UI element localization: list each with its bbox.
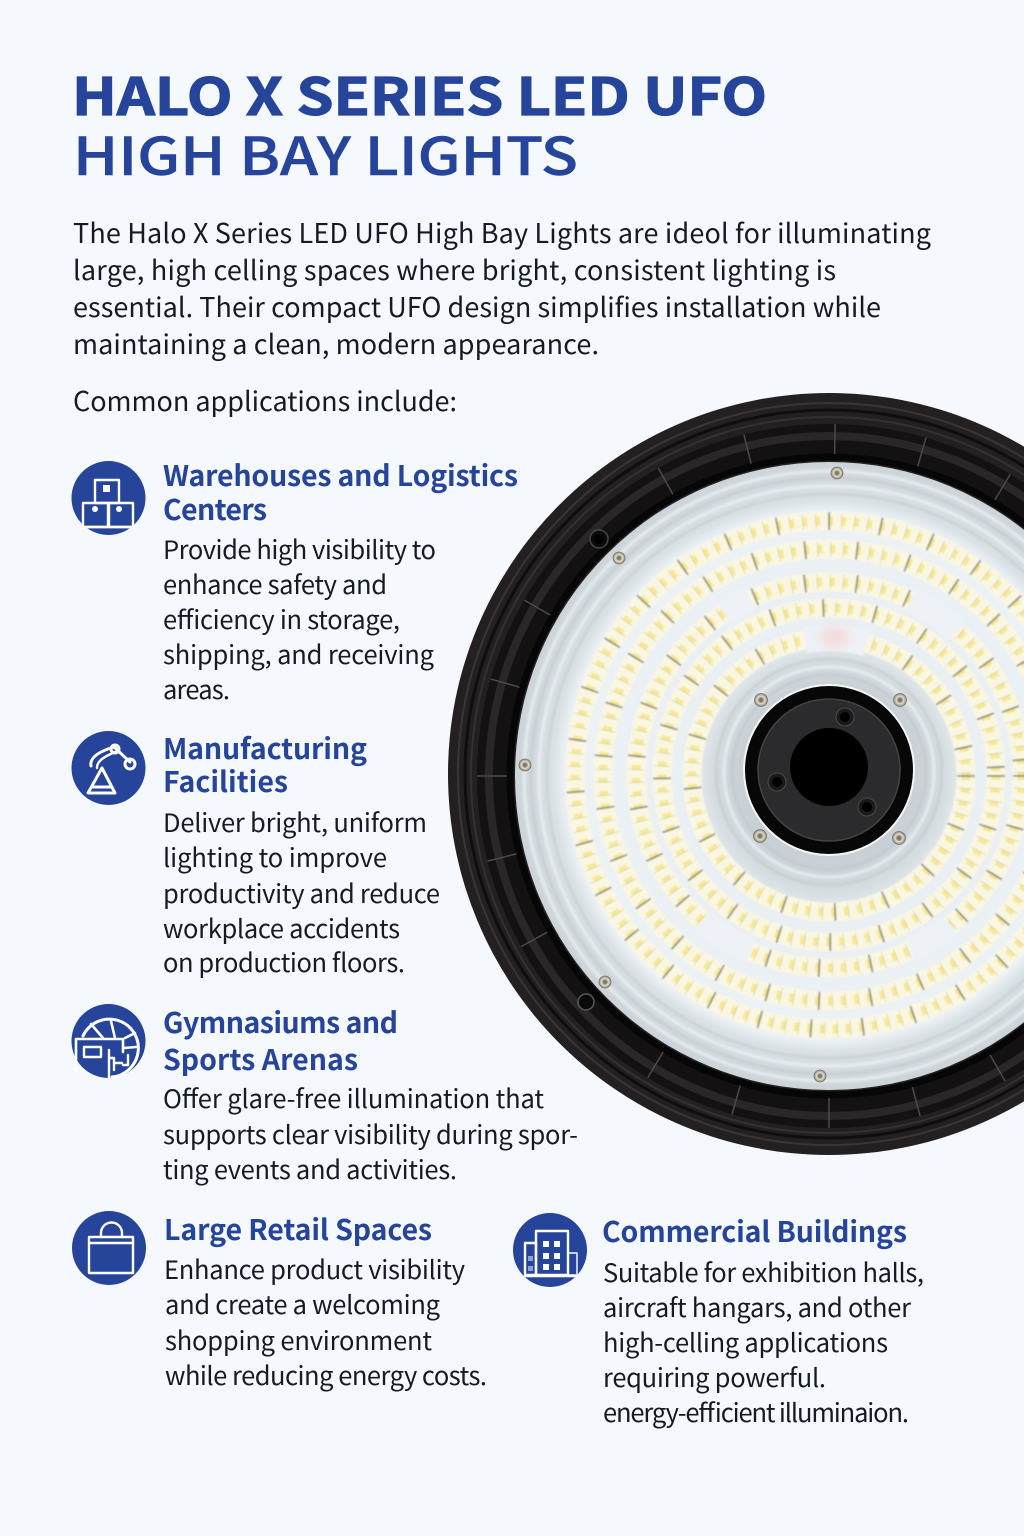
description <box>163 803 440 980</box>
description: requiring powerful. <box>603 1358 826 1395</box>
description: shopping environment <box>165 1321 432 1358</box>
housing mount holes <box>578 530 608 1010</box>
outer black housing <box>448 393 1024 1155</box>
LED ring 4 <box>662 608 996 942</box>
pink blemish <box>821 626 849 648</box>
heading: Large Retail Spaces <box>164 1208 432 1249</box>
description: lighting to improve <box>163 838 387 875</box>
description: Provide high visibility to <box>163 530 436 567</box>
heading: Commercial Buildings <box>602 1210 907 1251</box>
description: shipping, and receiving <box>163 635 435 672</box>
title: HIGH BAY LIGHTS <box>73 115 578 190</box>
item: gymnasiums <box>72 1001 578 1187</box>
description: high-celling applications <box>603 1323 888 1360</box>
heading: Facilities <box>163 760 288 801</box>
description: supports clear visibility during spor- <box>163 1115 578 1152</box>
description: areas. <box>163 670 230 707</box>
item: warehouses <box>72 454 518 707</box>
applications intro: Common applications include: <box>73 380 457 419</box>
heading <box>163 1001 398 1079</box>
description: productivity and reduce <box>163 874 440 911</box>
intro paragraph <box>73 212 931 362</box>
heading <box>163 727 367 801</box>
housing ribs <box>477 424 1010 1128</box>
icon: sports arena <box>72 1004 146 1078</box>
screws <box>519 467 906 1082</box>
description: efficiency in storage, <box>163 600 400 637</box>
description: energy-efficient illuminaion. <box>603 1393 909 1430</box>
item: commercial buildings <box>513 1210 924 1430</box>
description <box>164 1250 487 1393</box>
heading: Centers <box>163 488 267 529</box>
description: while reducing energy costs. <box>165 1356 487 1393</box>
LED ring 1 <box>575 521 1024 1029</box>
icon: stacked boxes <box>72 461 146 535</box>
item: retail <box>72 1208 487 1393</box>
heading: Gymnasiums and <box>163 1001 398 1042</box>
description: aircraft hangars, and other <box>603 1288 911 1325</box>
description <box>603 1253 924 1430</box>
title <box>72 56 767 190</box>
LED ring 5 <box>670 616 988 934</box>
heading: Manufacturing <box>163 727 367 768</box>
item: manufacturing <box>72 727 440 980</box>
icon: shopping bag <box>72 1211 146 1285</box>
reflector plate <box>515 462 1024 1090</box>
intro paragraph: The Halo X Series LED UFO High Bay Lights are ideol for illuminating <box>73 212 931 251</box>
description <box>163 1079 578 1187</box>
description: and create a welcoming <box>165 1285 441 1322</box>
description: Deliver bright, uniform <box>163 803 427 840</box>
intro paragraph: large, high celling spaces where bright, consistent lighting is <box>73 249 836 288</box>
heading <box>163 454 518 529</box>
intro paragraph: maintaining a clean, modern appearance. <box>73 323 599 362</box>
product photo: LED UFO high bay light <box>448 393 1024 1155</box>
LED ring 3 <box>558 504 1024 1046</box>
icon: robot arm <box>72 731 146 805</box>
heading: Sports Arenas <box>163 1038 358 1079</box>
description: Enhance product visibility <box>164 1250 465 1287</box>
central hub <box>743 684 915 856</box>
description: on production floors. <box>163 943 405 980</box>
title: HALO X SERIES LED UFO <box>72 56 767 130</box>
LED ring 2 <box>603 549 1024 1001</box>
description: ting events and activities. <box>163 1150 457 1187</box>
LED rings <box>558 504 1024 1046</box>
description: Suitable for exhibition halls, <box>603 1253 924 1290</box>
description <box>163 530 436 707</box>
heading: Warehouses and Logistics <box>163 454 518 495</box>
description: Offer glare-free illumination that <box>163 1079 544 1116</box>
description: workplace accidents <box>163 909 400 946</box>
icon: office buildings <box>513 1213 587 1287</box>
intro paragraph: essential. Their compact UFO design simplifies installation while <box>73 286 881 325</box>
description: enhance safety and <box>163 565 387 602</box>
